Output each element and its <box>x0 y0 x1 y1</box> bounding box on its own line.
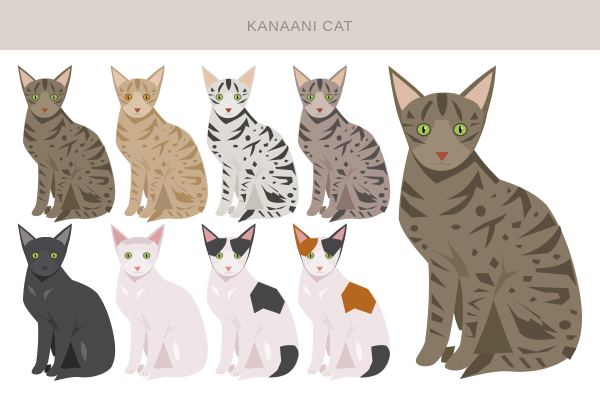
header band <box>0 0 600 50</box>
forehead shading <box>121 237 155 246</box>
cat: fawn tabby with amber eyes <box>110 65 208 223</box>
cat: large brown spotted tabby <box>388 66 582 379</box>
cat: white with black patches <box>201 223 299 381</box>
title: KANAANI CAT <box>247 18 353 35</box>
cat: brown tabby <box>18 65 115 223</box>
cat: calico with orange and black patches <box>293 223 390 381</box>
cat: silver tabby <box>201 65 299 223</box>
cat: solid black <box>18 223 115 381</box>
cat: solid cream white <box>110 223 208 381</box>
cat: lilac grey tabby <box>293 65 390 223</box>
